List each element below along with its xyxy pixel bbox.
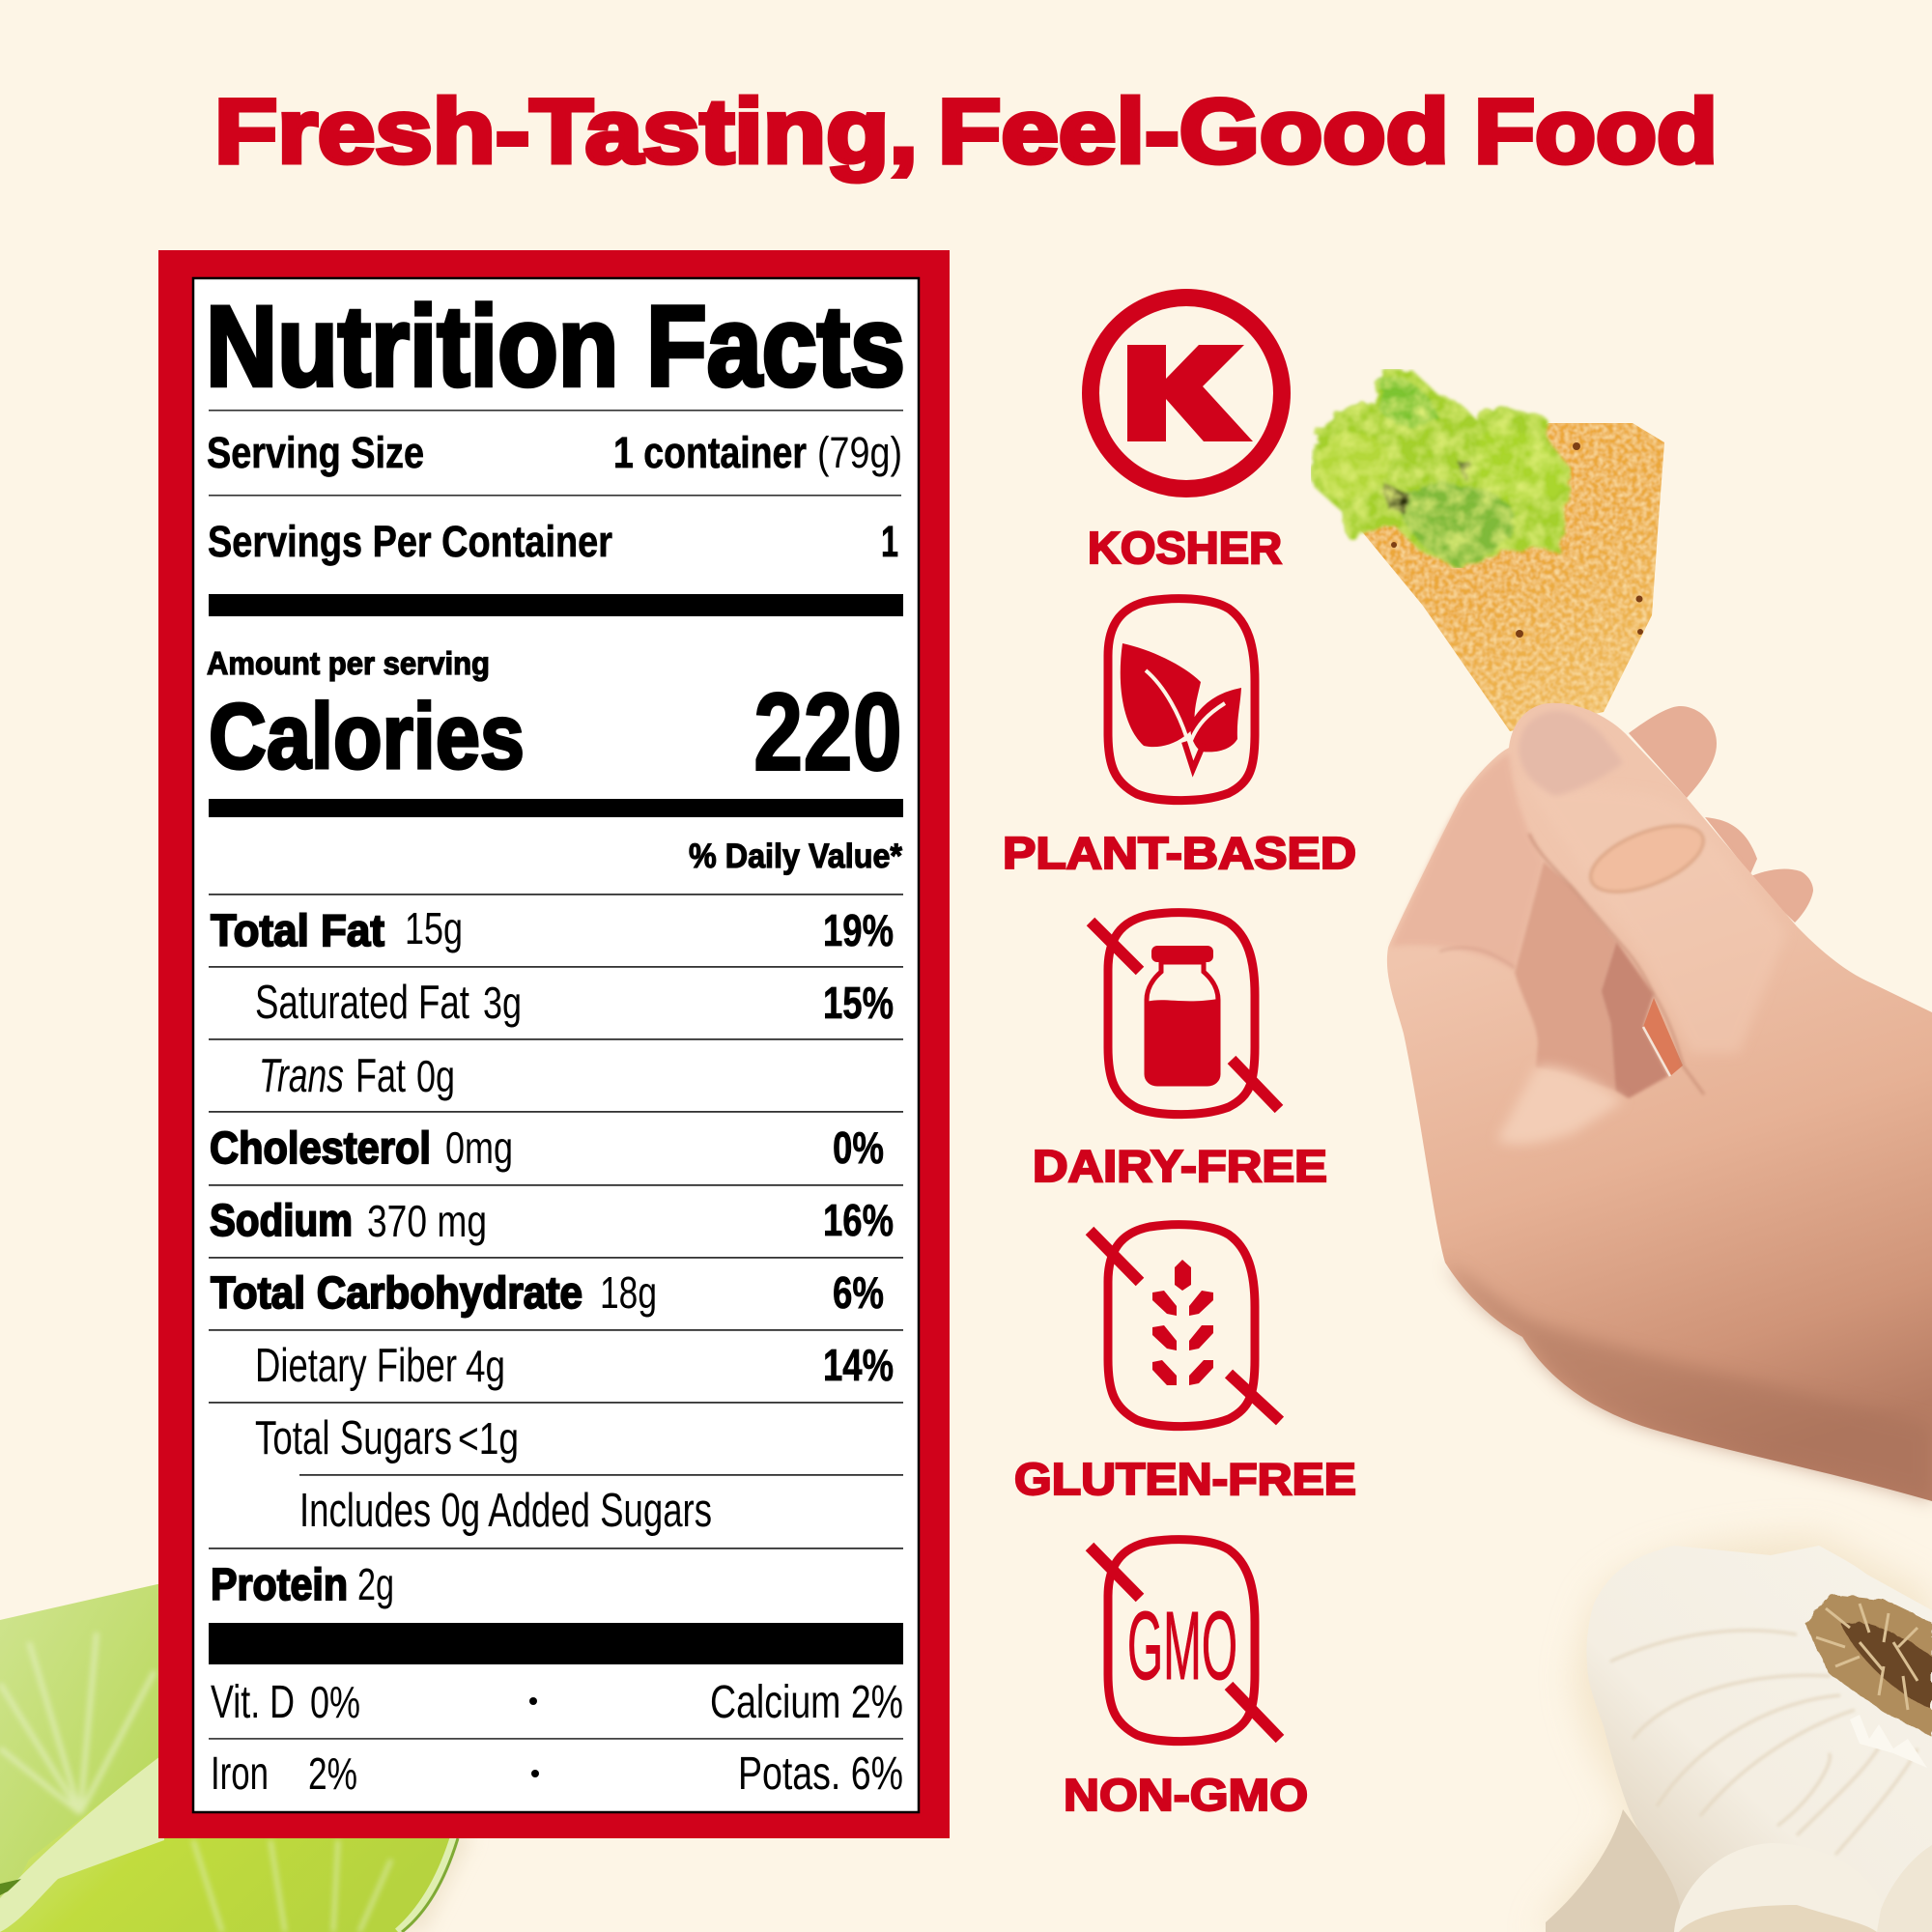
- row: sodium: [210, 1195, 894, 1246]
- hand lower shadow: [1445, 1263, 1932, 1501]
- chip reflection in fingers: [1643, 998, 1683, 1076]
- guacamole: [1311, 369, 1572, 568]
- row: total carbohydrate: 18g: [600, 1267, 657, 1318]
- thumb highlight: [1517, 773, 1787, 1053]
- row: trans fat: 0g: [416, 1051, 455, 1101]
- row: protein: Protein: [211, 1559, 348, 1609]
- row: iron and potassium: [211, 1748, 903, 1800]
- nutrition heading: Nutrition Facts: [206, 283, 905, 411]
- row: trans fat: Trans: [259, 1050, 344, 1102]
- row: vitamin d and calcium: 0%: [310, 1677, 360, 1727]
- row: dietary fiber: [255, 1340, 894, 1392]
- serving size row: Serving Size: [207, 428, 424, 477]
- serving size row: [207, 428, 902, 477]
- icon: gluten-free: [1090, 1225, 1280, 1427]
- panel: nutrition facts: [158, 250, 950, 1838]
- title: Feel-Good: [938, 80, 1449, 182]
- garlic body: [1586, 1546, 1932, 1932]
- garlic stem: [1546, 1809, 1710, 1932]
- row: cholesterol: Cholesterol: [210, 1122, 431, 1173]
- row: iron and potassium: Iron: [211, 1748, 269, 1800]
- row: cholesterol: [210, 1122, 884, 1173]
- row: iron and potassium: 2%: [308, 1748, 357, 1799]
- daily value heading: % Daily Value*: [689, 838, 902, 875]
- label: plant-based: PLANT-BASED: [1003, 828, 1356, 878]
- label: gluten-free: GLUTEN-FREE: [1014, 1454, 1356, 1504]
- row: total carbohydrate: 6%: [833, 1267, 884, 1318]
- row: total carbohydrate: Total Carbohydrate: [211, 1267, 582, 1318]
- row: trans fat: Fat: [355, 1050, 406, 1102]
- icon: kosher: [1091, 298, 1282, 489]
- thumb knuckle: [1581, 812, 1713, 905]
- thumb edge: [1529, 834, 1704, 1094]
- label: non-gmo: NON-GMO: [1064, 1770, 1308, 1820]
- row: cholesterol: 0mg: [445, 1122, 513, 1173]
- icon: plant-based: [1108, 599, 1255, 801]
- row: total sugars: Total Sugars: [255, 1412, 452, 1464]
- curled finger: [1515, 862, 1616, 1091]
- garlic root: [1804, 1594, 1932, 1737]
- row: protein: 2g: [357, 1559, 394, 1609]
- photo: lime wedges: [0, 1584, 473, 1932]
- row: total sugars: <1g: [458, 1413, 519, 1463]
- back curled finger: [1601, 941, 1668, 1098]
- back fingers: [1629, 706, 1813, 923]
- row: saturated fat: 3g: [483, 978, 522, 1028]
- palm pad: [1497, 1066, 1623, 1145]
- row: vitamin d and calcium: Vit. D: [211, 1677, 295, 1728]
- row: sodium: 370 mg: [367, 1196, 487, 1246]
- row: total carbohydrate: [211, 1267, 884, 1318]
- servings per container row: Servings Per Container: [208, 517, 612, 566]
- row: dietary fiber: 4g: [466, 1341, 505, 1391]
- serving size row: 1 container: [613, 428, 807, 477]
- photo: garlic bulb: [1536, 1536, 1932, 1932]
- photo: hand holding chip with guacamole: [1311, 369, 1932, 1501]
- row: trans fat: [259, 1050, 455, 1102]
- row: cholesterol: 0%: [833, 1122, 884, 1173]
- thumbnail: [1519, 711, 1623, 796]
- icon: non-gmo: [1090, 1540, 1280, 1742]
- row: iron and potassium: Potas. 6%: [738, 1748, 903, 1800]
- row: vitamin d and calcium: [211, 1677, 903, 1728]
- garlic clove: [1674, 1843, 1881, 1932]
- calories row: 220: [753, 671, 902, 794]
- icon: non-gmo: GMO: [1127, 1592, 1237, 1700]
- servings per container row: 1: [881, 517, 898, 566]
- chip burn spots: [1391, 442, 1643, 638]
- title: Fresh-Tasting,: [214, 80, 918, 182]
- row: saturated fat: Saturated Fat: [255, 977, 469, 1029]
- calories row: Calories: [209, 685, 525, 788]
- hand silhouette: [1387, 703, 1932, 1501]
- row: added sugars: Includes 0g Added Sugars: [299, 1485, 712, 1537]
- label: dairy-free: DAIRY-FREE: [1033, 1141, 1327, 1191]
- row: sodium: Sodium: [210, 1195, 353, 1245]
- icon: dairy-free: [1091, 913, 1279, 1115]
- row: sodium: 16%: [823, 1195, 894, 1245]
- label: kosher: KOSHER: [1088, 523, 1282, 573]
- row: dietary fiber: 14%: [823, 1340, 894, 1390]
- row: saturated fat: 15%: [823, 978, 894, 1028]
- row: vitamin d and calcium: Calcium 2%: [710, 1677, 903, 1728]
- title: Food: [1474, 80, 1718, 182]
- serving size row: (79g): [817, 428, 902, 477]
- index finger shading: [1391, 753, 1544, 971]
- chip: [1360, 423, 1664, 731]
- calories row: [209, 671, 902, 794]
- row: total fat: [211, 903, 894, 955]
- row: dietary fiber: Dietary Fiber: [255, 1340, 457, 1392]
- row: total fat: 19%: [823, 905, 894, 955]
- amount per serving: Amount per serving: [207, 645, 490, 681]
- row: total fat: Total Fat: [211, 905, 384, 955]
- row: saturated fat: [255, 977, 894, 1029]
- row: total fat: 15g: [405, 903, 463, 953]
- title: [214, 80, 1718, 182]
- servings per container row: [208, 517, 898, 566]
